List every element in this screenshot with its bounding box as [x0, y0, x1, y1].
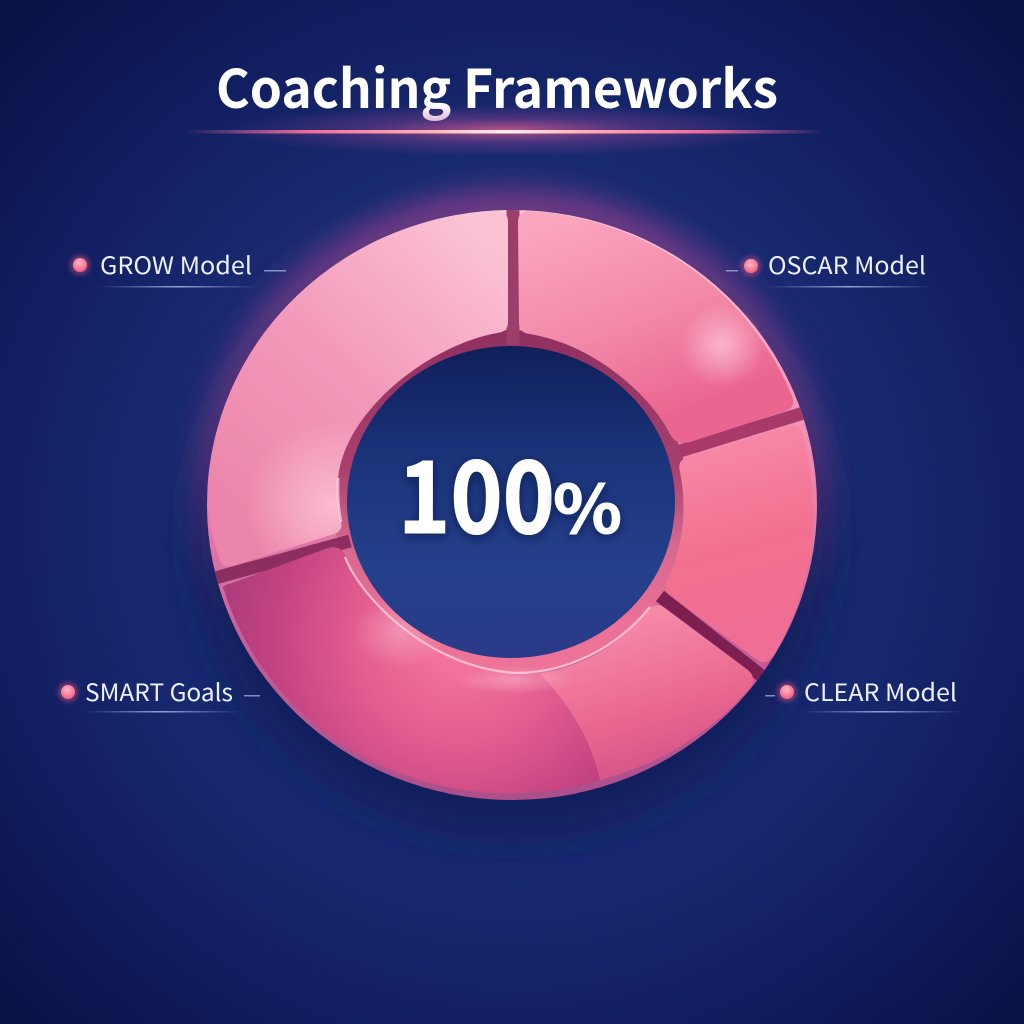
label: SMART Goals: [58, 673, 260, 712]
segment: GROW Model: [207, 211, 508, 567]
label: SMART Goals: SMART Goals: [85, 673, 233, 708]
label: OSCAR Model: [726, 246, 932, 288]
segment: OSCAR Model: [518, 211, 793, 443]
center value: 100: [398, 417, 555, 562]
segment: right block: [666, 425, 813, 662]
inner rim: [333, 330, 689, 674]
title: [185, 48, 825, 156]
segment: SMART Goals: [223, 547, 600, 793]
center value: %: [553, 457, 622, 553]
title underline: [185, 104, 825, 156]
label: GROW Model: [70, 246, 286, 288]
ring shadow: [187, 220, 837, 844]
seams: [215, 205, 810, 681]
ring base: [207, 210, 817, 800]
label: CLEAR Model: CLEAR Model: [804, 673, 957, 708]
segment: CLEAR Model: [539, 605, 753, 780]
title: Coaching Frameworks: [216, 48, 778, 124]
label: GROW Model: GROW Model: [100, 246, 252, 281]
sheen highlights: [338, 303, 764, 694]
GROW lower light: [258, 437, 350, 552]
ring glow: [208, 208, 816, 796]
donut chart: [187, 205, 837, 844]
label: OSCAR Model: OSCAR Model: [768, 246, 926, 281]
center hole: [347, 346, 675, 658]
label: CLEAR Model: [765, 673, 962, 712]
